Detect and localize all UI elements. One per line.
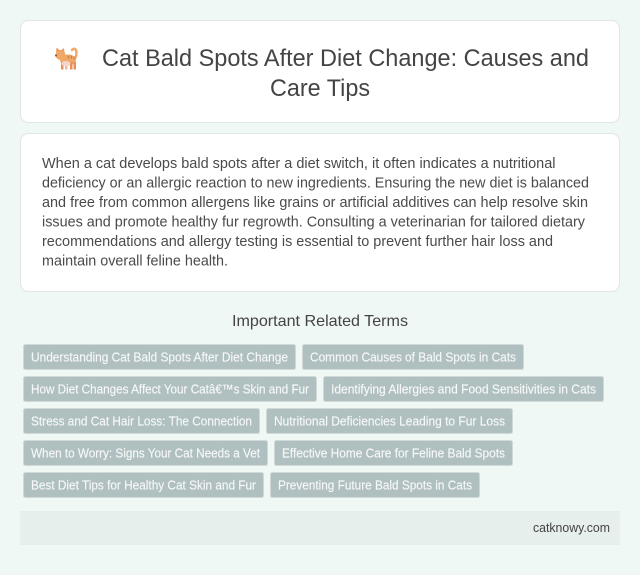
tag [24,376,316,402]
title text [102,45,589,102]
legs [61,62,64,70]
description text: When a cat develops bald spots after a diet switch, it often indicates a nutritional [42,156,556,172]
tag [24,408,260,434]
body [60,54,76,66]
tag [270,472,480,498]
tag: When to Worry: Signs Your Cat Needs a Vet [31,446,260,460]
title text: Cat Bald Spots After Diet Change: Causes and [102,45,589,72]
tag: Understanding Cat Bald Spots After Diet Change [31,350,288,364]
tag: Stress and Cat Hair Loss: The Connection [31,414,252,428]
tag list [24,344,604,498]
tag: Identifying Allergies and Food Sensitivities in Cats [331,382,596,396]
tag: Nutritional Deficiencies Leading to Fur Loss [274,414,505,428]
tag: Effective Home Care for Feline Bald Spots [282,446,505,460]
panel: description [20,134,620,292]
head [56,50,66,60]
description text [42,156,589,270]
heading: related terms: Important Related Terms [232,313,408,330]
tag [24,344,296,370]
tag [24,440,268,466]
description text: deficiency or an allergic reaction to new ingredients. Ensuring the new diet is balanced [42,176,589,192]
tag [302,344,524,370]
tail [72,49,76,60]
belly [62,61,70,66]
footer [20,511,620,545]
description text: and free from common allergens like grains or artificial additives can help resolve skin [42,195,588,211]
tag [324,376,604,402]
stripes [68,56,74,59]
icon: cat [55,48,76,70]
panel: title [20,20,620,122]
tag [266,408,512,434]
description text: recommendations and allergy testing is essential to prevent further hair loss and [42,234,553,250]
tag: Preventing Future Bald Spots in Cats [278,478,472,492]
title text: Care Tips [270,75,370,102]
description text: issues and promote healthy fur regrowth. Consulting a veterinarian for tailored dietary [42,214,586,230]
tag: Best Diet Tips for Healthy Cat Skin and Fur [31,478,256,492]
description text: maintain overall feline health. [42,254,228,270]
tag: How Diet Changes Affect Your Catâ€™s Skin and Fur [31,382,309,396]
tag [24,472,264,498]
footer source text: catknowy.com [533,520,610,535]
tag: Common Causes of Bald Spots in Cats [310,350,516,364]
tag [274,440,512,466]
